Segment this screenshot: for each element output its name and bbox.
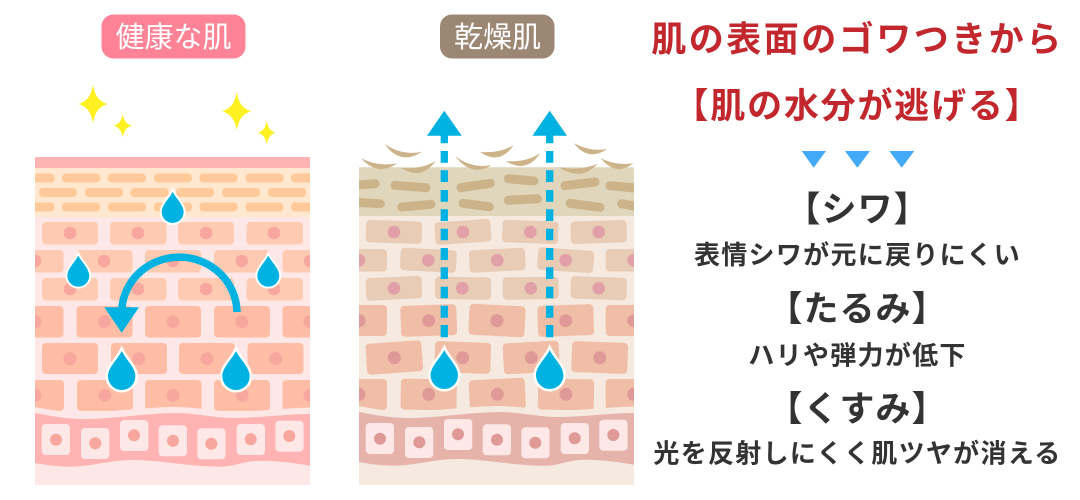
sparkles [78,85,276,144]
dashed arrow: water escaping right [532,111,567,337]
headline line 2: 【肌の水分が逃げる】 [673,87,1042,126]
heading pill: healthy skin [102,14,246,58]
panel: healthy skin cross-section [35,157,310,485]
dry nuclei [353,226,640,295]
dry horny layer cells [350,179,640,207]
dry basal layer [359,406,634,412]
text: wrinkles description: 表情シワが元に戻りにくい [694,240,1021,270]
heading pill: dry skin: 乾燥肌 [454,21,541,54]
flaking skin scales [361,143,633,174]
headline line 1: 肌の表面のゴワつきから [651,20,1064,60]
dashed arrow: water escaping left [427,111,462,337]
healthy basal layer [35,407,310,411]
heading: wrinkles: 【シワ】 [785,190,930,230]
circulation arrow [104,257,237,333]
water drops: healthy skin [67,192,279,390]
text: sagging description: ハリや弾力が低下 [748,340,967,370]
panel: dry skin cross-section [359,143,634,485]
healthy lower cells [35,306,310,411]
water drops: dry skin [431,350,563,389]
heading: dullness: 【くすみ】 [767,390,948,429]
heading pill: healthy skin: 健康な肌 [115,21,232,54]
text: dullness description: 光を反射しにくく肌ツヤが消える [653,438,1062,468]
heading: sagging: 【たるみ】 [767,290,948,329]
dry upper cells [359,219,634,301]
healthy upper cells [35,222,310,300]
dry lower cells [359,304,634,410]
heading pill: dry skin [440,14,554,58]
healthy horny layer cells [35,174,310,212]
down triangles [802,151,914,168]
healthy nuclei [28,227,316,402]
